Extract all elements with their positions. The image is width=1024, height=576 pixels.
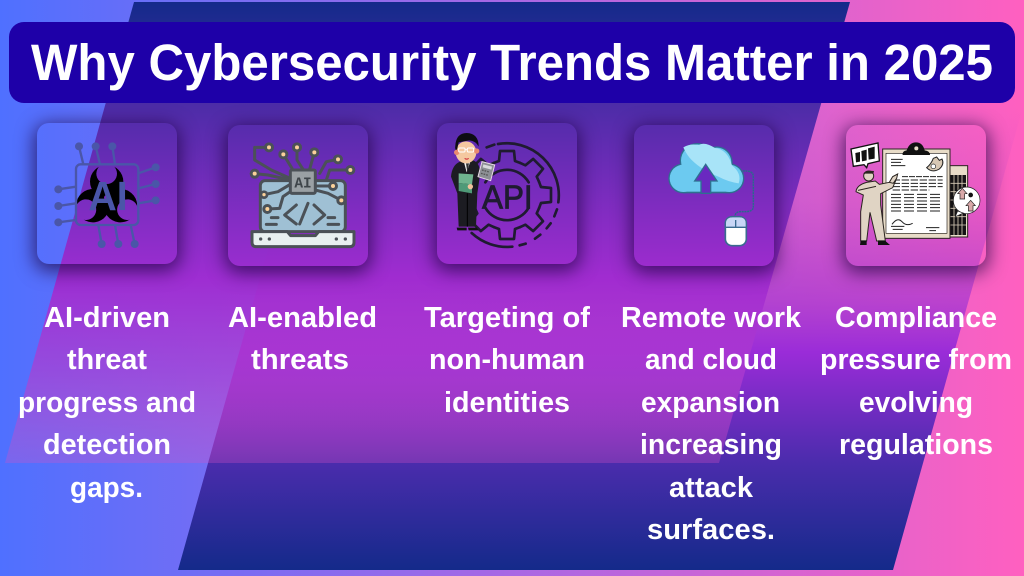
- title banner: [9, 22, 1015, 103]
- caption: Targeting of non-human identities: [424, 302, 590, 419]
- caption: AI-enabled threats: AI-enabled: [228, 302, 377, 334]
- caption: Remote work and cloud expansion: surfaces.: [647, 514, 775, 546]
- caption: Remote work and cloud expansion: attack: [669, 472, 754, 504]
- caption: Targeting of non-human identities: Targeting of: [424, 302, 590, 334]
- caption: AI-driven threat progress: AI-driven: [44, 302, 170, 334]
- icon: biohazard AI chip: AI: [88, 173, 128, 219]
- card: AI laptop: [228, 125, 368, 266]
- caption: Remote work and cloud expansion: increasing: [640, 429, 782, 461]
- caption: Remote work and cloud expansion: and cloud: [645, 344, 777, 376]
- card: compliance document: [846, 125, 986, 266]
- caption: Targeting of non-human identities: identities: [444, 387, 570, 419]
- caption: AI-enabled threats: [228, 302, 377, 376]
- caption: Compliance pressure: pressure from: [820, 344, 1012, 376]
- caption: Targeting of non-human identities: non-human: [429, 344, 585, 376]
- caption: Compliance pressure: evolving: [859, 387, 973, 419]
- caption: AI-driven threat progress: gaps.: [70, 472, 143, 504]
- icon: AI laptop with circuit traces: AI: [294, 177, 312, 193]
- caption: AI-enabled threats: threats: [251, 344, 349, 376]
- caption: Remote work and cloud expansion: [621, 302, 802, 546]
- card: cloud and mouse: [634, 125, 774, 266]
- caption: AI-driven threat progress: progress and: [18, 387, 196, 419]
- caption: Compliance pressure: Compliance: [835, 302, 997, 334]
- icon: API gear with businessman: API: [482, 179, 533, 216]
- caption: Remote work and cloud expansion: expansion: [641, 387, 780, 419]
- icon: cloud upload with mouse: [668, 143, 754, 246]
- icon: AI laptop with circuit traces: [250, 142, 356, 248]
- card: AI biohazard chip: [37, 123, 177, 264]
- icon: biohazard AI chip: [54, 142, 160, 248]
- icon: person presenting compliance clipboard: [850, 142, 980, 245]
- caption: Remote work and cloud expansion: Remote work: [621, 302, 802, 334]
- caption: AI-driven threat progress: [18, 302, 196, 504]
- caption: AI-driven threat progress: threat: [67, 344, 147, 376]
- caption: Compliance pressure: regulations: [839, 429, 993, 461]
- card: API gear and person: [437, 123, 577, 264]
- title banner: Why Cybersecurity Trends Matter in 2025: [31, 34, 993, 91]
- icon: API gear with businessman: [451, 133, 560, 248]
- caption: Compliance pressure: [820, 302, 1012, 461]
- caption: AI-driven threat progress: detection: [43, 429, 171, 461]
